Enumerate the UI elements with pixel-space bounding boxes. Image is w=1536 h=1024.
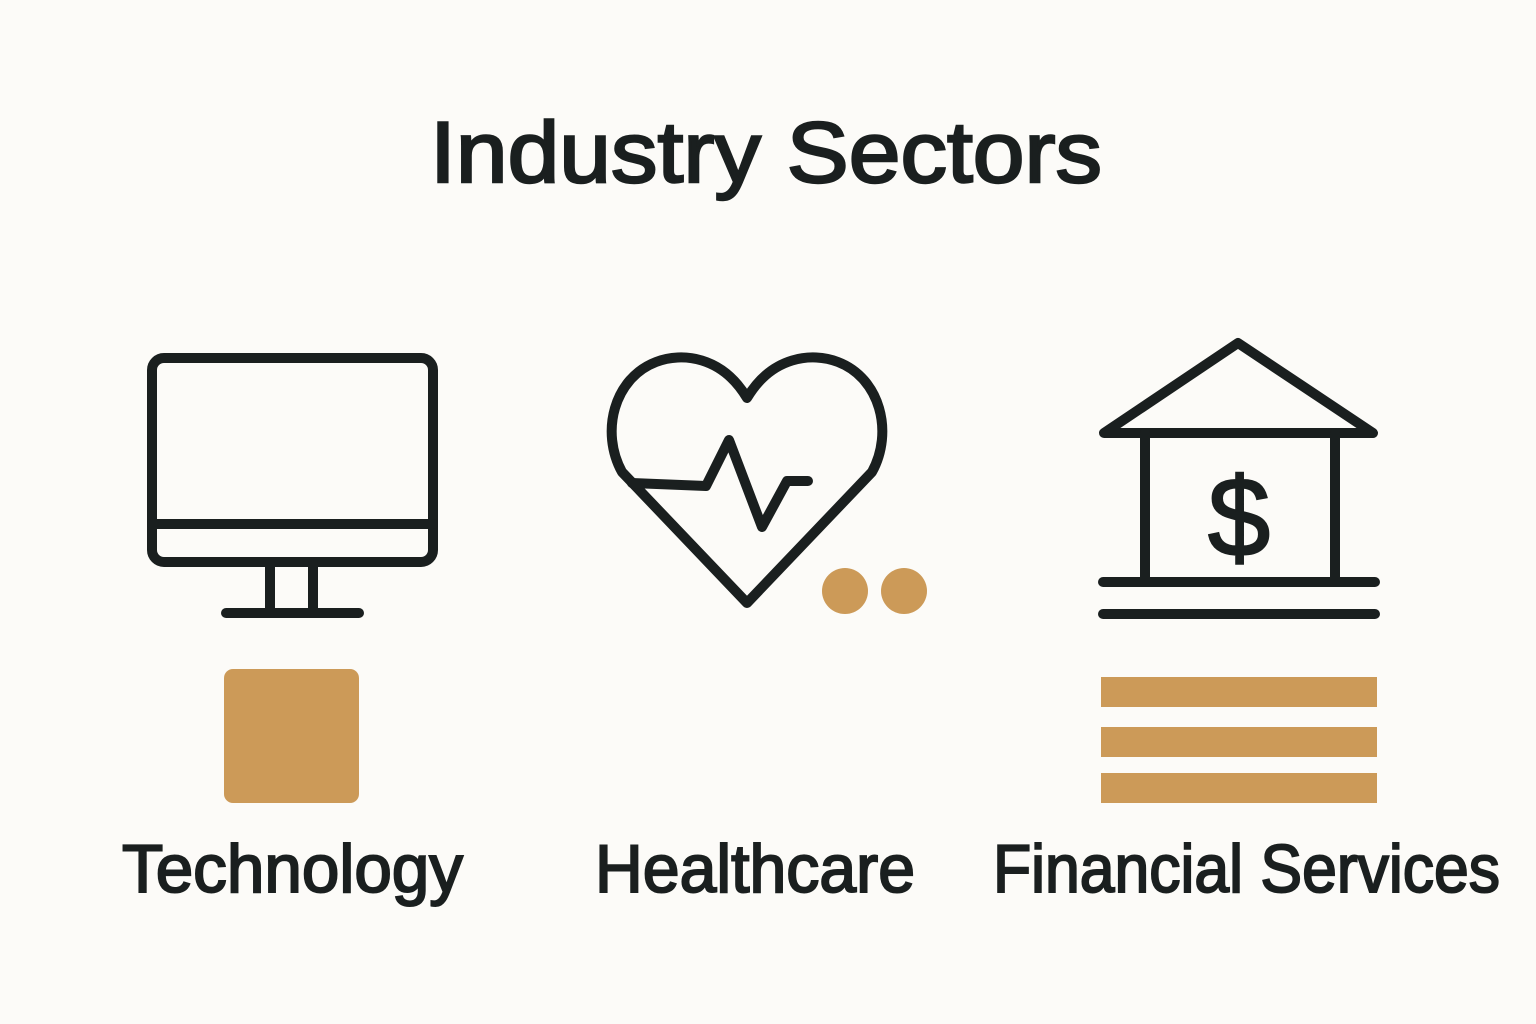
- gold dots: [822, 568, 927, 614]
- title: Industry Sectors: [430, 105, 1102, 201]
- icon: heart with pulse: [612, 357, 882, 603]
- gold bars: [1101, 677, 1377, 803]
- panel: financial services: [993, 343, 1500, 907]
- icon: monitor: [152, 358, 433, 613]
- panel: healthcare: [595, 357, 927, 907]
- label: Financial Services: Financial Services: [993, 831, 1500, 907]
- label: Healthcare: Healthcare: [595, 831, 915, 907]
- gold square: [224, 669, 359, 803]
- icon: bank: [1103, 343, 1375, 614]
- panel: technology: [122, 358, 463, 907]
- label: Technology: Technology: [122, 831, 463, 907]
- dollar sign: $: [1208, 455, 1270, 580]
